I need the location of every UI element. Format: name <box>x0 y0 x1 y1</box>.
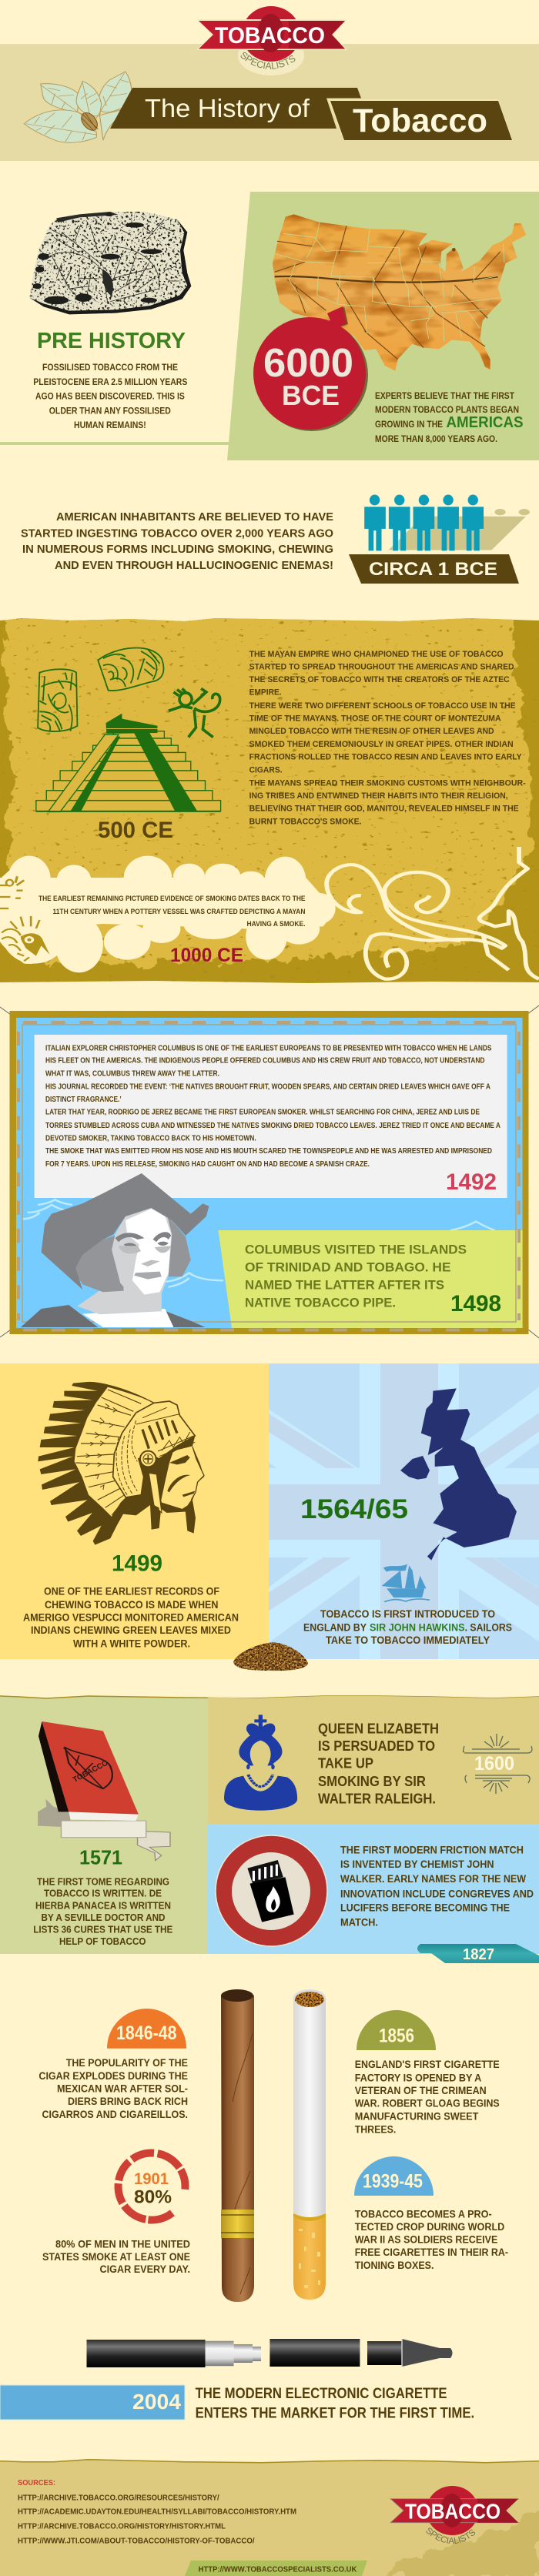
text: sir john hawkins: TAKE TO TOBACCO IMMEDIATELY <box>326 1634 490 1646</box>
panel: trinidad and tobago: OF TRINIDAD AND TOBAGO. HE <box>245 1260 451 1275</box>
text box: columbus: WHAT IT WAS, COLUMBUS THREW AWAY THE LATTER. <box>45 1069 219 1078</box>
text: mayan empire <box>249 650 526 827</box>
logo: footer tobacco specialists: TOBACCO <box>405 2500 500 2524</box>
text: chewing tobacco: CHEWING TOBACCO IS MADE WHEN <box>45 1599 219 1611</box>
panel: 1901 eighty percent: CIGAR EVERY DAY. <box>100 2263 190 2275</box>
panel: 1901 eighty percent: 80% OF MEN IN THE UNITED <box>55 2238 190 2250</box>
text: earliest pictured evidence: HAVING A SMOKE. <box>246 920 305 928</box>
text: sir john hawkins: SIR JOHN HAWKINS <box>370 1621 465 1633</box>
icon: queen silhouette <box>224 1715 297 1811</box>
text: mayan empire: THERE WERE TWO DIFFERENT SCHOOLS OF TOBACCO USE IN THE <box>249 701 516 711</box>
date: 1571: 1571 <box>79 1846 122 1869</box>
text: queen elizabeth: TAKE UP <box>318 1756 373 1771</box>
panel: 1499 amerigo vespucci <box>0 1363 269 1659</box>
text: mayan empire: THE SECRETS OF TOBACCO WITH THE CREATORS OF THE AZTEC <box>249 675 510 684</box>
text: earliest pictured evidence <box>38 896 305 926</box>
decoration: aztec swirls <box>326 847 539 979</box>
text: sir john hawkins: TOBACCO IS FIRST INTRODUCED TO <box>320 1608 495 1620</box>
text: mayan empire: SMOKED THEM CEREMONIOUSLY IN GREAT PIPES. OTHER INDIAN <box>249 740 514 749</box>
text: first tome: THE FIRST TOME REGARDING <box>37 1875 169 1887</box>
text: mayan empire: TIME OF THE MAYANS. THOSE OF THE COURT OF MONTEZUMA <box>249 714 501 723</box>
text: american inhabitants <box>21 511 333 572</box>
text: queen elizabeth: QUEEN ELIZABETH <box>318 1721 439 1737</box>
text box: columbus <box>35 1035 507 1198</box>
panel: 1939-45 world war ii: TECTED CROP DURING WORLD <box>355 2221 505 2233</box>
panel: 1856 first cigarette factory: THREES. <box>355 2123 396 2135</box>
text: american inhabitants: STARTED INGESTING TOBACCO OVER 2,000 YEARS AGO <box>21 528 333 540</box>
badge: 6000 bce: BCE <box>282 380 340 411</box>
title ribbon: tobacco: Tobacco <box>353 102 487 139</box>
badge: 6000 bce <box>253 306 368 431</box>
panel: 1939-45 world war ii: TOBACCO BECOMES A PRO- <box>355 2209 492 2220</box>
panel: 2004 electronic cigarette <box>0 2385 474 2422</box>
panel: 1846-48 cigars <box>38 2009 188 2120</box>
icon: map of uk <box>400 1388 517 1561</box>
badge: 6000 bce: 6000 <box>263 341 353 386</box>
union flag background <box>269 1363 539 1659</box>
panel: 1846-48 cigars: 1846-48 <box>116 2022 177 2044</box>
text box: columbus: 1492 <box>446 1169 497 1195</box>
date: 500 ce: 500 CE <box>98 818 173 843</box>
text: friction match: THE FIRST MODERN FRICTION MATCH <box>340 1844 524 1855</box>
logo: footer tobacco specialists: SPECIALISTS <box>427 2527 475 2544</box>
text: queen elizabeth: SMOKING BY SIR <box>318 1774 426 1789</box>
text: first tome: BY A SEVILLE DOCTOR AND <box>42 1912 165 1923</box>
icon: us map made of tobacco leaf <box>273 214 526 371</box>
title ribbon: the history of: The History of <box>145 94 310 122</box>
title ribbon: tobacco <box>328 99 513 140</box>
panel: 2004 electronic cigarette: ENTERS THE MARKET FOR THE FIRST TIME. <box>196 2406 474 2422</box>
text: queen elizabeth <box>318 1721 439 1807</box>
text: first tome: HIERBA PANACEA IS WRITTEN <box>35 1899 171 1911</box>
text: pre history paragraph: AGO HAS BEEN DISCOVERED. THIS IS <box>35 393 185 402</box>
icon: cigarette <box>293 1989 326 2300</box>
text: friction match <box>340 1844 534 1929</box>
text: first modern plants: GROWING IN THE <box>375 420 443 430</box>
icon: cigar <box>221 1989 254 2302</box>
banner: website link: HTTP://WWW.TOBACCOSPECIALISTS.CO.UK <box>199 2565 357 2574</box>
panel: pre history <box>29 212 191 430</box>
text: american inhabitants: IN NUMEROUS FORMS INCLUDING SMOKING, CHEWING <box>22 544 333 556</box>
panel: circa 1 bce <box>21 495 530 584</box>
date: 1499: 1499 <box>112 1551 162 1577</box>
text: mayan empire: CIGARS. <box>249 765 283 774</box>
panel: 1846-48 cigars: CIGARROS AND CIGAREILLOS. <box>42 2109 188 2120</box>
text: earliest pictured evidence: THE EARLIEST REMAINING PICTURED EVIDENCE OF SMOKING DATES BACK TO THE <box>38 895 305 903</box>
text: first tome: LISTS 36 CURES THAT USE THE <box>33 1924 173 1935</box>
icon: tobacco leaves <box>24 72 138 142</box>
panel: 1939-45 world war ii: FREE CIGARETTES IN THEIR RA- <box>355 2246 508 2258</box>
text: queen elizabeth: WALTER RALEIGH. <box>318 1791 436 1807</box>
text: first tome: TOBACCO IS WRITTEN. DE <box>44 1888 162 1899</box>
icon: electronic cigarette <box>86 2339 453 2367</box>
text: earliest pictured evidence: 11TH CENTURY WHEN A POTTERY VESSEL WAS CRAFTED DEPICTING A MAYAN <box>52 908 306 916</box>
panel: 1846-48 cigars: MEXICAN WAR AFTER SOL- <box>57 2083 188 2095</box>
panel: 1901 eighty percent: STATES SMOKE AT LEAST ONE <box>42 2251 190 2263</box>
ornament: date 1600: 1600 <box>474 1753 514 1775</box>
text: first modern plants: AMERICAS <box>447 414 524 431</box>
text box: columbus: DISTINCT FRAGRANCE.’ <box>45 1096 122 1104</box>
text: chewing tobacco: AMERIGO VESPUCCI MONITORED AMERICAN <box>23 1611 239 1623</box>
panel: 1901 eighty percent: 80% <box>134 2187 172 2208</box>
panel: 2004 electronic cigarette: 2004 <box>132 2390 181 2414</box>
panel: 1564/65 sir john hawkins <box>269 1363 539 1659</box>
panel: trinidad and tobago: 1498 <box>450 1291 501 1316</box>
text: mayan empire: STARTED TO SPREAD THROUGHOUT THE AMERICAS AND SHARED <box>249 662 514 671</box>
heading: pre history: PRE HISTORY <box>37 329 186 353</box>
icon: mayan pyramid <box>36 714 221 811</box>
icon: mayan glyph top <box>98 648 163 691</box>
panel: 1856 first cigarette factory: ENGLAND'S FIRST CIGARETTE <box>355 2059 500 2070</box>
text: mayan empire: THE MAYAN EMPIRE WHO CHAMPIONED THE USE OF TOBACCO <box>249 650 504 659</box>
panel: 1939-45 world war ii: WAR II AS SOLDIERS RECEIVE <box>355 2234 497 2246</box>
panel: 1856 first cigarette factory <box>355 2010 500 2135</box>
text: friction match: MATCH. <box>340 1917 378 1929</box>
panel: trinidad and tobago: COLUMBUS VISITED THE ISLANDS <box>245 1242 467 1256</box>
panel: 1901 eighty percent <box>42 2153 190 2275</box>
logo: tobacco specialists: TOBACCO <box>215 23 325 49</box>
ribbon: 1827: 1827 <box>463 1946 494 1963</box>
sources list: HTTP://WWW.JTI.COM/ABOUT-TOBACCO/HISTORY-OF-TOBACCO/ <box>18 2536 255 2545</box>
text: pre history paragraph: PLEISTOCENE ERA 2.5 MILLION YEARS <box>33 378 188 387</box>
text: pre history paragraph: FOSSILISED TOBACCO FROM THE <box>42 363 178 373</box>
icon: pile of tobacco <box>233 1642 308 1671</box>
text: first modern plants: MORE THAN 8,000 YEARS AGO. <box>375 435 497 444</box>
icon: mayan monkey <box>169 688 220 738</box>
panel: 1939-45 world war ii: TIONING BOXES. <box>355 2260 434 2271</box>
panel: columbus <box>0 1005 539 1338</box>
text: chewing tobacco: ONE OF THE EARLIEST RECORDS OF <box>44 1586 219 1597</box>
portrait: christopher columbus <box>21 1173 209 1327</box>
sources list: HTTP://ARCHIVE.TOBACCO.ORG/HISTORY/HISTORY.HTML <box>18 2522 226 2531</box>
panel: 1901 eighty percent: 1901 <box>134 2170 169 2188</box>
panel: 1827 friction match <box>208 1824 539 1963</box>
ribbon: 1827 <box>417 1944 539 1963</box>
icon: fossil rock <box>29 212 191 314</box>
panel: 1571 first tome <box>0 1696 539 1954</box>
decoration: aztec bird <box>0 869 52 964</box>
date: 1000 ce: 1000 CE <box>170 945 243 966</box>
text: sir john hawkins: ENGLAND BY <box>303 1621 367 1633</box>
logo: footer tobacco specialists <box>390 2486 519 2544</box>
frame stitching <box>18 1022 519 1330</box>
text: mayan empire: FRACTIONS ROLLED THE TOBACCO RESIN AND LEAVES INTO EARLY <box>249 753 522 762</box>
text: chewing tobacco: INDIANS CHEWING GREEN LEAVES MIXED <box>31 1624 231 1636</box>
text: sir john hawkins: . SAILORS <box>465 1621 512 1633</box>
date: 1564/65: 1564/65 <box>300 1494 408 1524</box>
panel: 1846-48 cigars: DIERS BRING BACK RICH <box>68 2096 188 2107</box>
panel: 1856 first cigarette factory: 1856 <box>379 2026 414 2047</box>
panel: 6000 bce <box>227 192 539 460</box>
text: mayan empire: MINGLED TOBACCO WITH THE RESIN OF OTHER LEAVES AND <box>249 727 494 736</box>
panel: 1600 queen elizabeth <box>208 1696 539 1824</box>
text box: columbus: DEVOTED SMOKER, TAKING TOBACCO BACK TO HIS HOMETOWN. <box>45 1134 256 1142</box>
text: mayan empire: THE MAYANS SPREAD THEIR SMOKING CUSTOMS WITH NEIGHBOUR- <box>249 778 526 788</box>
panel: trinidad and tobago: NATIVE TOBACCO PIPE. <box>245 1295 396 1310</box>
footer panel <box>0 2459 539 2576</box>
text: mayan empire: BURNT TOBACCO'S SMOKE. <box>249 818 362 827</box>
banner: circa 1 bce: CIRCA 1 BCE <box>369 559 497 580</box>
cloud of smoke <box>0 856 336 972</box>
icon: matchbox badge <box>216 1835 327 1946</box>
icon: native american chief <box>38 1382 204 1545</box>
text: pre history paragraph: OLDER THAN ANY FOSSILISED <box>49 406 171 416</box>
divider strip <box>0 442 229 445</box>
waves <box>22 1199 495 1287</box>
icon: mayan glyph left <box>38 669 77 731</box>
panel: 1939-45 world war ii <box>354 2156 508 2271</box>
text: friction match: LUCIFERS BEFORE BECOMING THE <box>340 1902 510 1914</box>
panel: 1939-45 world war ii: 1939-45 <box>363 2171 423 2193</box>
panel: 1856 first cigarette factory: VETERAN OF THE CRIMEAN <box>355 2085 487 2096</box>
text: pre history paragraph <box>33 363 188 430</box>
panel: trinidad and tobago: NAMED THE LATTER AFTER ITS <box>245 1277 444 1292</box>
sources list: HTTP://ARCHIVE.TOBACCO.ORG/RESOURCES/HISTORY/ <box>18 2493 219 2502</box>
text: american inhabitants: AND EVEN THROUGH HALLUCINOGENIC ENEMAS! <box>55 560 333 572</box>
text: friction match: IS INVENTED BY CHEMIST JOHN <box>340 1858 494 1870</box>
panel: 2004 electronic cigarette: THE MODERN ELECTRONIC CIGARETTE <box>196 2386 447 2402</box>
panel: 1856 first cigarette factory: MANUFACTURING SWEET <box>355 2111 479 2123</box>
book title: TOBACCO <box>72 1759 110 1785</box>
text: friction match: WALKER. EARLY NAMES FOR THE NEW <box>340 1873 526 1885</box>
banner: circa 1 bce <box>349 554 519 584</box>
text: first modern plants: EXPERTS BELIEVE THAT THE FIRST <box>375 392 514 401</box>
text: first tome <box>33 1875 173 1947</box>
panel: 1856 first cigarette factory: FACTORY IS OPENED BY A <box>355 2072 482 2083</box>
text: mayan empire: ING TRIBES AND ENTWINED THEIR HABITS INTO THEIR RELIGION, <box>249 791 508 801</box>
sources list: HTTP://ACADEMIC.UDAYTON.EDU/HEALTH/SYLLABI/TOBACCO/HISTORY.HTM <box>18 2507 296 2517</box>
text: first tome: HELP OF TOBACCO <box>59 1935 146 1947</box>
ornament: date 1600 <box>464 1734 532 1794</box>
panel: 1846-48 cigars: THE POPULARITY OF THE <box>66 2057 188 2069</box>
text: first modern plants: MODERN TOBACCO PLANTS BEGAN <box>375 406 519 415</box>
panel: mayan 500 ce and 1000 ce <box>0 601 539 985</box>
title ribbon: the history of <box>110 88 361 129</box>
text: american inhabitants: AMERICAN INHABITANTS ARE BELIEVED TO HAVE <box>56 511 333 524</box>
banner: website link <box>185 2561 367 2576</box>
sources list <box>18 2479 296 2545</box>
panel: 1846-48 cigars: CIGAR EXPLODES DURING THE <box>38 2070 188 2082</box>
logo: tobacco specialists: SPECIALISTS <box>240 52 296 69</box>
sources list: SOURCES: <box>18 2479 55 2487</box>
logo: tobacco specialists <box>196 6 347 75</box>
icon: row of people with shadows <box>364 495 530 550</box>
header band <box>0 44 539 161</box>
text: first modern plants <box>375 392 524 444</box>
panel: 1856 first cigarette factory: WAR. ROBERT GLOAG BEGINS <box>355 2097 500 2109</box>
icon: sailing ship <box>382 1564 430 1602</box>
text: sir john hawkins <box>303 1608 512 1646</box>
text: pre history paragraph: HUMAN REMAINS! <box>74 421 146 430</box>
ring chart: 80% <box>119 2153 185 2220</box>
text: mayan empire: BELIEVING THAT THEIR GOD, MANITOU, REVEALED HIMSELF IN THE <box>249 804 519 813</box>
text: mayan empire: EMPIRE. <box>249 688 282 698</box>
text: chewing tobacco: WITH A WHITE POWDER. <box>73 1638 190 1649</box>
icon: tobacco book and ribbon <box>38 1721 170 1861</box>
panel: trinidad and tobago <box>219 1230 523 1328</box>
text: chewing tobacco <box>23 1586 239 1649</box>
text box: columbus: FOR 7 YEARS. UPON HIS RELEASE, SMOKING HAD CAUGHT ON AND HAD BECOME A SPANISH CRAZE. <box>45 1160 370 1169</box>
text: queen elizabeth: IS PERSUADED TO <box>318 1738 435 1754</box>
